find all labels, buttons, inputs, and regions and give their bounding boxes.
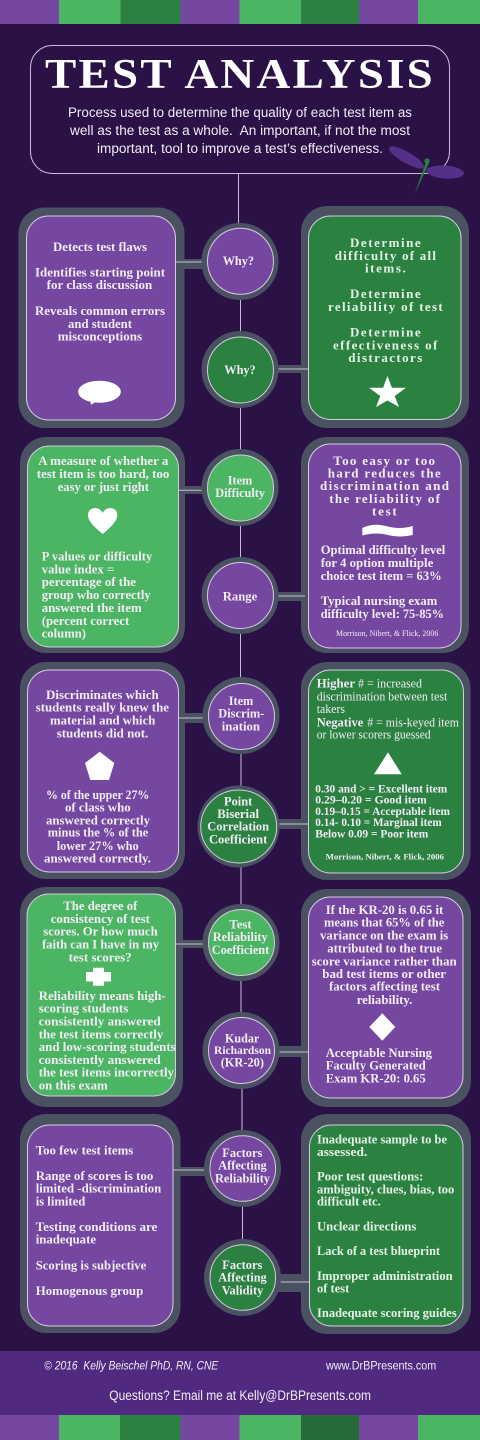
card text: effectiveness of [333,338,438,352]
definition text: consistency of test [51,911,151,926]
card [310,1125,463,1326]
citation: Morrison, Nibert, & Flick, 2006 [336,629,438,638]
panel: range right [273,437,469,653]
factor list: inadequate [36,1232,96,1247]
score scale: Below 0.09 = Poor item [315,827,428,841]
icon: plaque cross [86,968,111,986]
factor list: Range of scores is too [36,1168,153,1183]
card text: and student [68,316,133,331]
definition text: The degree of [63,898,138,913]
p value text: group who correctly [42,587,151,602]
reliability text: and low-scoring students [39,1039,176,1054]
interpretation text: takers [317,701,345,716]
card [28,446,178,647]
card [308,216,461,420]
explanation text: bad test items or other [322,966,446,981]
node: factors validity: Factors [222,1257,262,1272]
range text [321,542,446,621]
warning text: hard reduces the [328,466,441,480]
warning text: Too easy or too [333,453,435,468]
card text [328,235,443,365]
copyright: © 2016 Kelly Beischel PhD, RN, CNE [44,1359,219,1373]
range text: for 4 option multiple [321,555,434,570]
factor list: assessed. [317,1144,367,1159]
icon: wave banner [362,525,413,536]
factor list: Unclear directions [317,1219,416,1234]
node: factors reliability: Reliability [215,1171,270,1186]
interpretation text: Negative [317,714,364,729]
footer band [0,1351,480,1415]
definition text [42,898,159,964]
calculation text: lower 27% who [57,838,139,853]
explanation text: variance on the exam is [320,928,448,943]
intro text: well as the test as a whole. An important, if not the most [69,123,410,138]
card text: Detects test flaws [53,239,147,254]
factor list: Poor test questions: [317,1169,423,1184]
reliability text [39,988,176,1092]
card text: for class discussion [47,277,153,292]
node: item discrimination: Discrim- [218,706,264,721]
warning text: discrimination and [320,478,450,493]
panel: kuder richardson right [272,889,471,1107]
acceptable value [326,1045,432,1086]
node: item difficulty: Item [228,472,252,487]
card text: Identifies starting point [35,265,166,280]
intro text: important, tool to improve a test’s effectiveness. [97,141,383,156]
header panel [30,46,464,194]
reliability text: consistently answered [39,1014,161,1029]
node: item discrimination [202,677,280,754]
calculation text: minus the % of the [48,825,149,840]
top colour strip [0,0,480,24]
factor list: difficult etc. [317,1194,381,1209]
frame and connector [20,887,208,1107]
description text: material and which [50,713,156,728]
score scale: 0.14- 0.10 = Marginal item [315,815,442,829]
node: test reliability: Test [229,917,252,932]
range text: difficulty level: 75-85% [321,606,444,621]
interpretation text: Higher [317,676,355,691]
node: range [202,557,278,634]
p value text [42,549,153,640]
range text: Optimal difficulty level [321,542,446,557]
score scale: 0.30 and > = Excellent item [315,782,447,796]
warning text: test [372,504,397,518]
frame and connector [18,208,205,428]
frame and connector [273,437,469,653]
node: factors reliability [204,1130,281,1207]
node: item difficulty: Difficulty [215,485,265,500]
card text: items. [365,260,406,276]
card text: Determine [350,325,421,340]
description text: students did not. [57,725,148,740]
reliability text: Reliability means high- [39,988,166,1003]
node: kuder richardson [202,1012,280,1089]
node: factors validity: Affecting [218,1270,267,1285]
node: factors validity: Validity [222,1283,264,1298]
factor list: Testing conditions are [36,1219,158,1234]
reliability text: the test items incorrectly [39,1065,174,1080]
explanation text: score variance rather than [312,953,457,968]
definition text: test item is too hard, too [37,466,169,481]
node: factors validity [204,1239,281,1316]
panel: discrimination left [20,662,208,879]
calculation text: % of the upper 27% [46,787,149,802]
node: why green: Why? [224,362,256,377]
node: point biserial [198,786,280,868]
interpretation text: discrimination between test [317,689,448,704]
range text: choice test item = 63% [321,568,442,583]
factor list: Scoring is subjective [36,1258,147,1273]
node: test reliability: Reliability [213,929,268,944]
card text: difficulty of all [335,248,436,263]
calculation text: answered correctly. [44,851,151,866]
reliability text: on this exam [39,1077,108,1092]
node: kuder richardson: Kudar [225,1031,260,1046]
card text: misconceptions [58,329,142,344]
node: test reliability [202,904,280,981]
node: why purple: Why? [223,253,254,268]
frame and connector [273,206,469,428]
acceptable value: Exam KR-20: 0.65 [326,1071,426,1086]
factor list: Lack of a test blueprint [317,1243,441,1258]
acceptable value: Acceptable Nursing [326,1045,432,1060]
icon: star [369,376,406,407]
acceptable value: Faculty Generated [326,1058,426,1073]
card text: reliability of test [328,299,443,314]
p value text: value index = [42,562,114,576]
panel: why right [273,206,469,428]
factor list: is limited [36,1193,86,1208]
node: item discrimination: Item [229,693,253,708]
card [28,1125,173,1326]
node: point biserial: Point [224,793,253,808]
p value text: answered the item [42,600,142,615]
card text [35,239,166,344]
p value text: (percent correct [42,613,130,628]
card text: Determine [350,286,421,301]
factor list: of test [317,1281,350,1296]
factor list: ambiguity, clues, bias, too [317,1181,454,1196]
card [308,670,464,873]
reliability text: consistently answered [39,1052,161,1067]
citation: Morrison, Nibert, & Flick, 2006 [326,851,444,861]
card [308,444,461,648]
header outline [30,46,450,174]
definition text: A measure of whether a [38,453,169,468]
node: factors reliability: Factors [222,1145,262,1160]
icon: diamond [369,1013,395,1041]
connecting timeline [238,173,242,1245]
card text: distractors [348,350,422,365]
panel: factors validity right [276,1114,471,1334]
frame and connector [20,662,208,879]
score scale: 0.29–0.20 = Good item [315,793,427,807]
node: why green [202,331,278,408]
factor list: Inadequate scoring guides [317,1305,457,1320]
explanation text: reliability. [357,992,412,1007]
node: why purple [202,223,278,300]
explanation text: factors affecting test [329,979,441,994]
interpretation text: # = increased [358,676,422,691]
definition text: scores. Or how much [43,924,158,939]
frame and connector [276,889,471,1107]
explanation text: If the KR-20 is 0.65 it [326,902,444,917]
icon: pentagon [85,752,114,780]
card text: Determine [350,235,421,250]
definition text: faith can I have in my [42,936,159,951]
reliability text: the test items correctly [39,1026,164,1041]
bottom colour strip [0,1415,480,1440]
card [27,894,176,1096]
interpretation text: or lower scorers guessed [317,727,431,742]
warning text: the reliability of [329,491,441,506]
frame and connector [276,662,470,880]
frame and connector [276,1114,471,1334]
title: TEST ANALYSIS [45,52,435,98]
frame and connector [20,437,207,653]
intro text: Process used to determine the quality of each test item as [68,105,412,120]
website: www.DrBPresents.com [325,1359,436,1373]
card [28,670,178,872]
factor list: Improper administration [317,1268,453,1283]
definition text: test scores? [69,949,132,964]
icon: heart [88,508,117,534]
node: factors reliability: Affecting [218,1158,267,1173]
interpretation text: # = mis-keyed item [367,714,459,729]
explanation text: means that 65% of the [324,915,445,930]
node: item difficulty [202,449,278,526]
card [308,897,463,1098]
panel: factors reliability left [20,1114,212,1333]
score scale: 0.19–0.15 = Acceptable item [315,804,450,818]
node: range: Range [223,589,258,604]
icon: speech bubble [78,381,121,405]
p value text: P values or difficulty [42,549,153,564]
panel: item difficulty left [20,437,207,653]
factor list: Inadequate sample to be [317,1132,447,1147]
intro text [68,105,412,156]
node: point biserial: Biserial [217,806,259,821]
node: kuder richardson: (KR-20) [221,1055,264,1070]
icon: triangle [374,752,402,774]
description text [36,687,169,740]
node: point biserial: Coefficient [209,831,268,846]
range text: Typical nursing exam [321,593,437,608]
panel: point biserial right [276,662,470,880]
reliability text: scoring students [39,1001,128,1016]
calculation text: of class who [65,800,131,815]
icon: dragonfly [386,143,464,194]
card text: Reveals common errors [35,303,165,318]
node: item discrimination: ination [222,718,261,733]
factor list: limited -discrimination [36,1181,162,1196]
panel: reliability left [20,887,208,1107]
factor list: Homogenous group [36,1283,143,1298]
contact line: Questions? Email me at Kelly@DrBPresents.com [109,1388,371,1403]
frame and connector [20,1114,212,1333]
factor list [36,1142,162,1298]
explanation text [312,902,457,1007]
calculation text: answered correctly [46,813,150,828]
factor list [317,1132,457,1320]
calculation text [44,787,151,866]
definition text: easy or just right [58,479,150,494]
node: point biserial: Correlation [207,819,270,834]
factor list: Too few test items [36,1142,133,1157]
node: kuder richardson: Richardson [214,1043,271,1057]
interpretation text [317,676,459,742]
warning text [320,453,450,518]
p value text: column) [42,626,86,640]
p value text: percentage of the [42,574,136,589]
definition text [37,453,169,494]
score scale [315,782,450,841]
description text: Discriminates which [46,687,159,702]
card [26,216,176,420]
description text: students really knew the [36,700,169,715]
node: test reliability: Coefficient [212,942,270,957]
explanation text: attributed to the true [327,940,442,955]
panel: why left [18,208,207,428]
